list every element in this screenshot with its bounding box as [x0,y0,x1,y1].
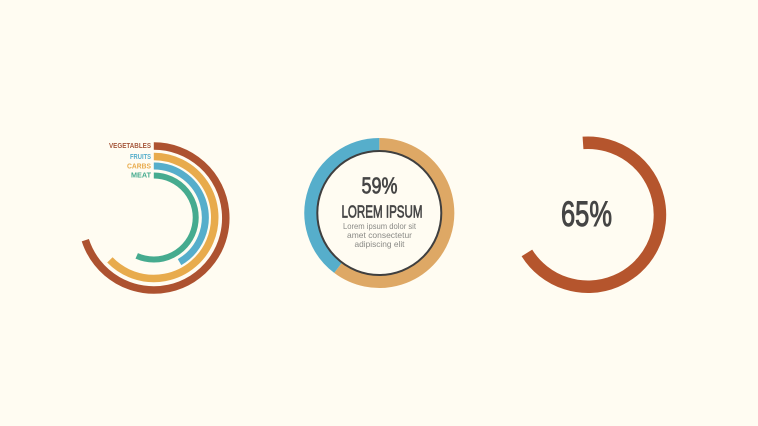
chart: 59% donut [311,144,448,281]
body text: amet consectetur [347,230,412,240]
heading: lorem ipsum: LOREM IPSUM [342,202,422,222]
label: meat: MEAT [131,173,152,180]
arc: vegetables [85,146,226,290]
arc: carbs [110,156,215,278]
arc: 65% [527,143,660,287]
segment: tan [338,144,448,281]
arc: meat [137,176,196,259]
chart: concentric food rings [85,143,226,290]
value: 59%: 59% [362,172,398,198]
label: fruits: FRUITS [130,154,151,161]
label: vegetables: VEGETABLES [109,143,151,150]
value: 65%: 65% [561,195,612,234]
segment: blue [311,144,379,268]
label: carbs: CARBS [127,163,151,170]
body text: Lorem ipsum dolor sit [343,221,417,231]
arc: fruits [154,166,205,262]
chart: 65% ring [527,143,660,287]
body text [343,221,417,249]
body text: adipiscing elit [354,239,405,249]
inner circle [317,151,441,275]
